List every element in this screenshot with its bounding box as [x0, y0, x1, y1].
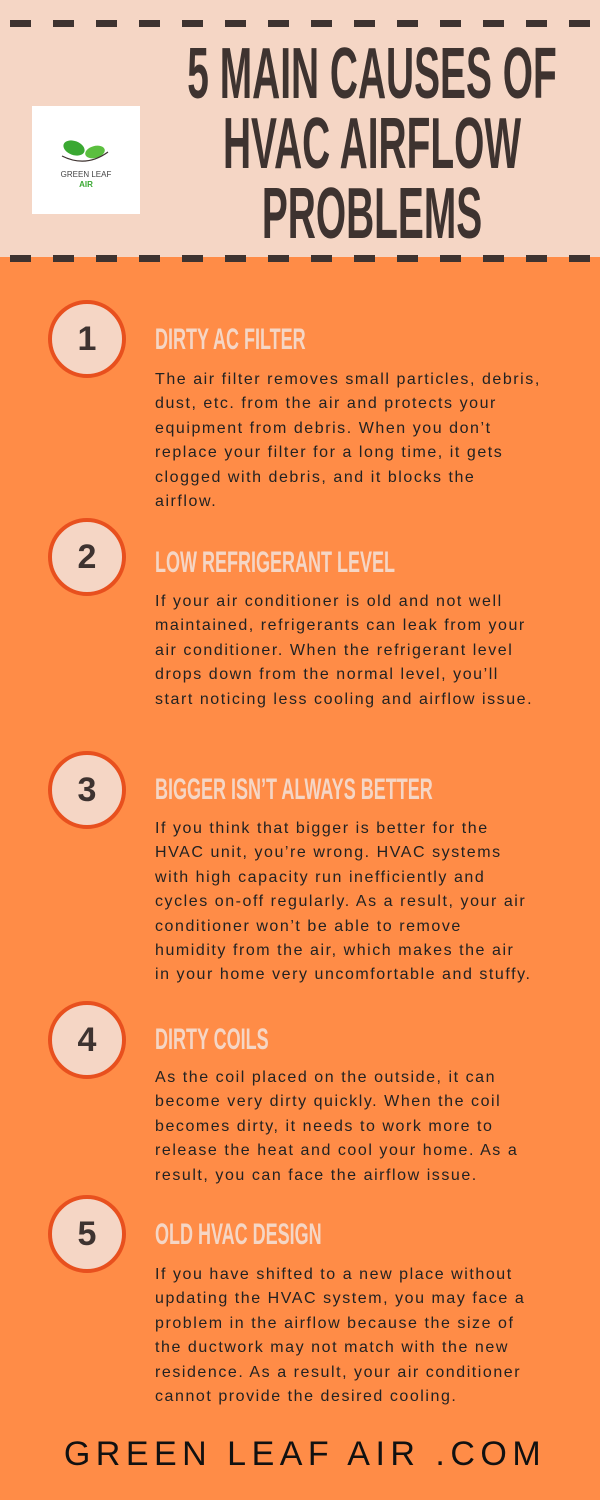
text: humidity from the air, which makes the air — [155, 942, 514, 959]
text: The air filter removes small particles, debris, — [155, 371, 541, 388]
item 2 — [48, 518, 533, 708]
text: BIGGER ISN’T ALWAYS BETTER — [155, 773, 433, 806]
item 1 — [48, 300, 541, 510]
text: replace your filter for a long time, it gets — [155, 444, 503, 461]
text: maintained, refrigerants can leak from your — [155, 617, 526, 634]
text: dust, etc. from the air and protects your — [155, 395, 497, 412]
text: LOW REFRIGERANT LEVEL — [155, 546, 395, 579]
header panel — [0, 0, 600, 257]
text: HVAC unit, you’re wrong. HVAC systems — [155, 844, 502, 861]
text: start noticing less cooling and airflow issue. — [155, 691, 533, 708]
text: in your home very uncomfortable and stuffy. — [155, 966, 531, 983]
logo: GREEN LEAF — [61, 170, 111, 179]
text: If you think that bigger is better for the — [155, 820, 489, 837]
text: become very dirty quickly. When the coil — [155, 1093, 501, 1110]
item 4 — [48, 1001, 518, 1184]
logo — [32, 106, 140, 214]
footer: GREEN LEAF AIR .COM — [64, 1435, 546, 1473]
text: 3 — [78, 771, 96, 809]
text: becomes dirty, it needs to work more to — [155, 1118, 494, 1135]
text: air conditioner. When the refrigerant level — [155, 642, 513, 659]
text: 4 — [78, 1021, 96, 1059]
text: HVAC AIRFLOW — [223, 104, 521, 184]
text: If your air conditioner is old and not well — [155, 593, 503, 610]
text: with high capacity run inefficiently and — [155, 869, 485, 886]
text: residence. As a result, your air conditioner — [155, 1364, 521, 1381]
text: problem in the airflow because the size of — [155, 1315, 514, 1332]
text: drops down from the normal level, you’ll — [155, 666, 499, 683]
text: release the heat and cool your home. As a — [155, 1142, 518, 1159]
item 3 — [48, 751, 531, 983]
text: DIRTY AC FILTER — [155, 323, 306, 356]
text: updating the HVAC system, you may face a — [155, 1290, 525, 1307]
text: airflow. — [155, 493, 217, 510]
title — [187, 34, 557, 254]
text: If you have shifted to a new place without — [155, 1266, 513, 1283]
text: PROBLEMS — [262, 174, 482, 254]
text: 5 — [78, 1215, 96, 1253]
text: 2 — [78, 538, 96, 576]
text: cannot provide the desired cooling. — [155, 1388, 457, 1405]
text: 1 — [78, 320, 96, 358]
text: As the coil placed on the outside, it can — [155, 1069, 496, 1086]
text: 5 MAIN CAUSES OF — [187, 34, 557, 114]
text: equipment from debris. When you don’t — [155, 420, 492, 437]
text: DIRTY COILS — [155, 1023, 269, 1056]
item 5 — [48, 1195, 525, 1405]
text: OLD HVAC DESIGN — [155, 1218, 322, 1251]
text: conditioner won’t be able to remove — [155, 918, 462, 935]
logo: AIR — [79, 180, 93, 189]
text: result, you can face the airflow issue. — [155, 1167, 478, 1184]
text: clogged with debris, and it blocks the — [155, 469, 475, 486]
text: cycles on-off regularly. As a result, your air — [155, 893, 526, 910]
text: the ductwork may not match with the new — [155, 1339, 509, 1356]
